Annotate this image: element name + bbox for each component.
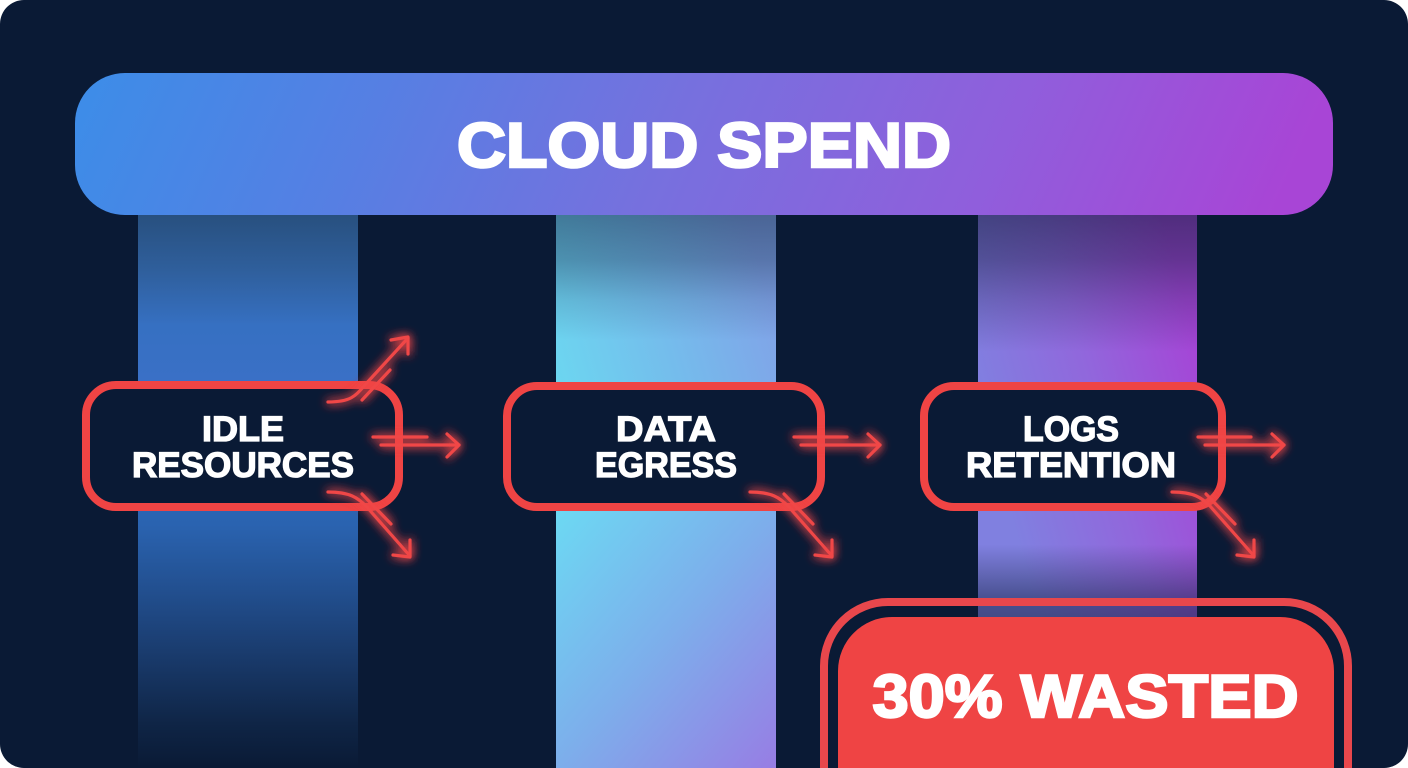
column: idle resources (138, 215, 358, 768)
label: data egress: DATA (616, 410, 716, 449)
card: data egress (507, 386, 821, 507)
title: CLOUD SPEND (457, 111, 951, 181)
arrows: idle resources up (328, 337, 408, 402)
label: idle resources: RESOURCES (132, 446, 354, 485)
callout fill (838, 617, 1334, 768)
arrows: logs retention down (1172, 492, 1254, 557)
column: logs retention (978, 215, 1197, 617)
label: data egress: EGRESS (595, 446, 737, 485)
label: logs retention: LOGS (1023, 410, 1119, 449)
arrows: idle resources right (373, 434, 459, 457)
arrows: logs retention right (1198, 434, 1284, 457)
column: data egress (556, 215, 776, 768)
callout text: 30% WASTED (872, 663, 1298, 730)
arrows: data egress right (794, 434, 880, 457)
card: idle resources (86, 385, 399, 507)
card: logs retention (924, 386, 1222, 507)
label: logs retention: RETENTION (966, 446, 1176, 485)
header bar: cloud spend (75, 73, 1333, 215)
label: idle resources: IDLE (202, 410, 284, 449)
callout: 30% wasted (824, 602, 1348, 768)
callout outer ring (824, 602, 1348, 768)
arrows: data egress down (750, 492, 832, 557)
arrows: idle resources down (328, 492, 410, 557)
